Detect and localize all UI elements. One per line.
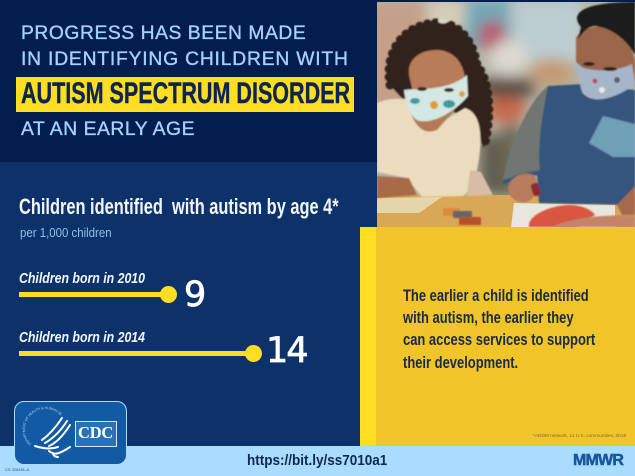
dot 2014	[245, 344, 262, 362]
heading: progress line 1: PROGRESS HAS BEEN MADE	[21, 23, 306, 44]
value 14: 14	[266, 331, 307, 371]
footnote: *ADDM network, 11 U.S. communities, 2018	[533, 434, 626, 439]
logo badge: HHS and CDC	[14, 401, 127, 465]
icon: HHS eagle	[22, 406, 71, 458]
MMWR logo: MMWR	[573, 452, 623, 469]
icon: CDC logo: CDC	[78, 422, 113, 442]
clearance code: CS 328491-A	[5, 467, 29, 472]
footer band	[0, 446, 635, 476]
table	[377, 195, 635, 227]
chart subheading: per 1,000 children	[20, 225, 112, 240]
panel: children photo illustration	[377, 0, 635, 227]
heading: at an early age: AT AN EARLY AGE	[21, 119, 195, 140]
bar 2014	[19, 351, 254, 356]
girl	[377, 18, 493, 198]
chart: lollipop 2014	[19, 330, 307, 371]
chart heading: Children identified with autism by age 4*	[19, 194, 339, 219]
panel: header background	[0, 0, 377, 162]
dot 2010	[160, 286, 177, 302]
label 2014: Children born in 2014	[19, 330, 145, 346]
label 2010: Children born in 2010	[19, 271, 145, 287]
text: early identification message: with autism, the earlier they	[403, 309, 574, 327]
boy	[503, 2, 635, 227]
text: early identification message: can access services to support	[403, 331, 595, 349]
panel: yellow message panel	[360, 227, 635, 446]
bar 2010	[19, 292, 169, 296]
heading: progress line 2: IN IDENTIFYING CHILDREN WITH	[21, 49, 349, 70]
text: early identification message	[403, 287, 596, 372]
text: early identification message: their development.	[403, 354, 518, 372]
accent strip	[360, 227, 376, 446]
footer url: https://bit.ly/ss7010a1	[247, 452, 387, 469]
heading: highlighted autism spectrum disorder: AUTISM SPECTRUM DISORDER	[21, 77, 350, 110]
text: early identification message: The earlier a child is identified	[403, 287, 589, 305]
value 9: 9	[184, 274, 206, 314]
icon: CDC logo	[75, 420, 117, 446]
chart: lollipop 2010	[19, 271, 206, 314]
